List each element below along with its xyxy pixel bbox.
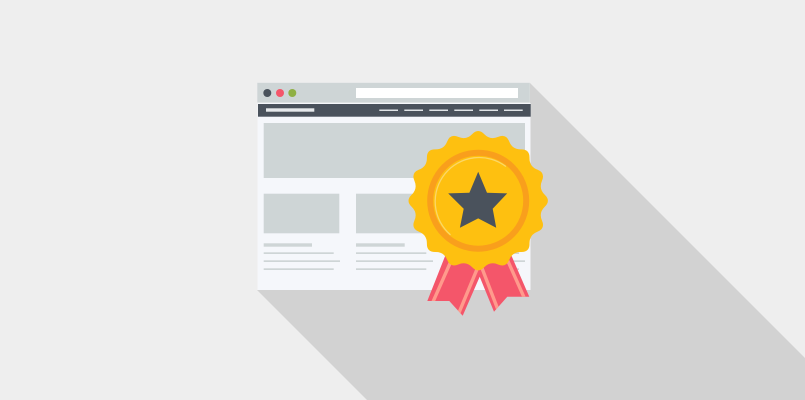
- star: [448, 172, 507, 228]
- content column 1: [264, 194, 340, 270]
- site logo placeholder: [266, 108, 314, 112]
- scalloped seal: [409, 131, 548, 270]
- hero image placeholder: [264, 123, 525, 178]
- ring highlight arc: [431, 155, 512, 236]
- ribbon stripes: [432, 260, 526, 314]
- orange ring: [430, 153, 526, 249]
- window control: green dot: [288, 89, 296, 97]
- window control: dark dot: [263, 89, 271, 97]
- navigation bar: [258, 104, 531, 117]
- content column 2: [356, 194, 433, 270]
- illustration: website with award badge: [257, 82, 805, 400]
- address bar: [356, 88, 518, 98]
- long diagonal shadow: [257, 83, 805, 400]
- window body: [258, 103, 530, 290]
- window control: red dot: [276, 89, 284, 97]
- title bar: [257, 83, 530, 102]
- menu items: [379, 110, 523, 111]
- content column 3: [449, 252, 525, 270]
- ribbons: [427, 256, 530, 316]
- award badge: [409, 131, 548, 320]
- browser window: [257, 83, 531, 290]
